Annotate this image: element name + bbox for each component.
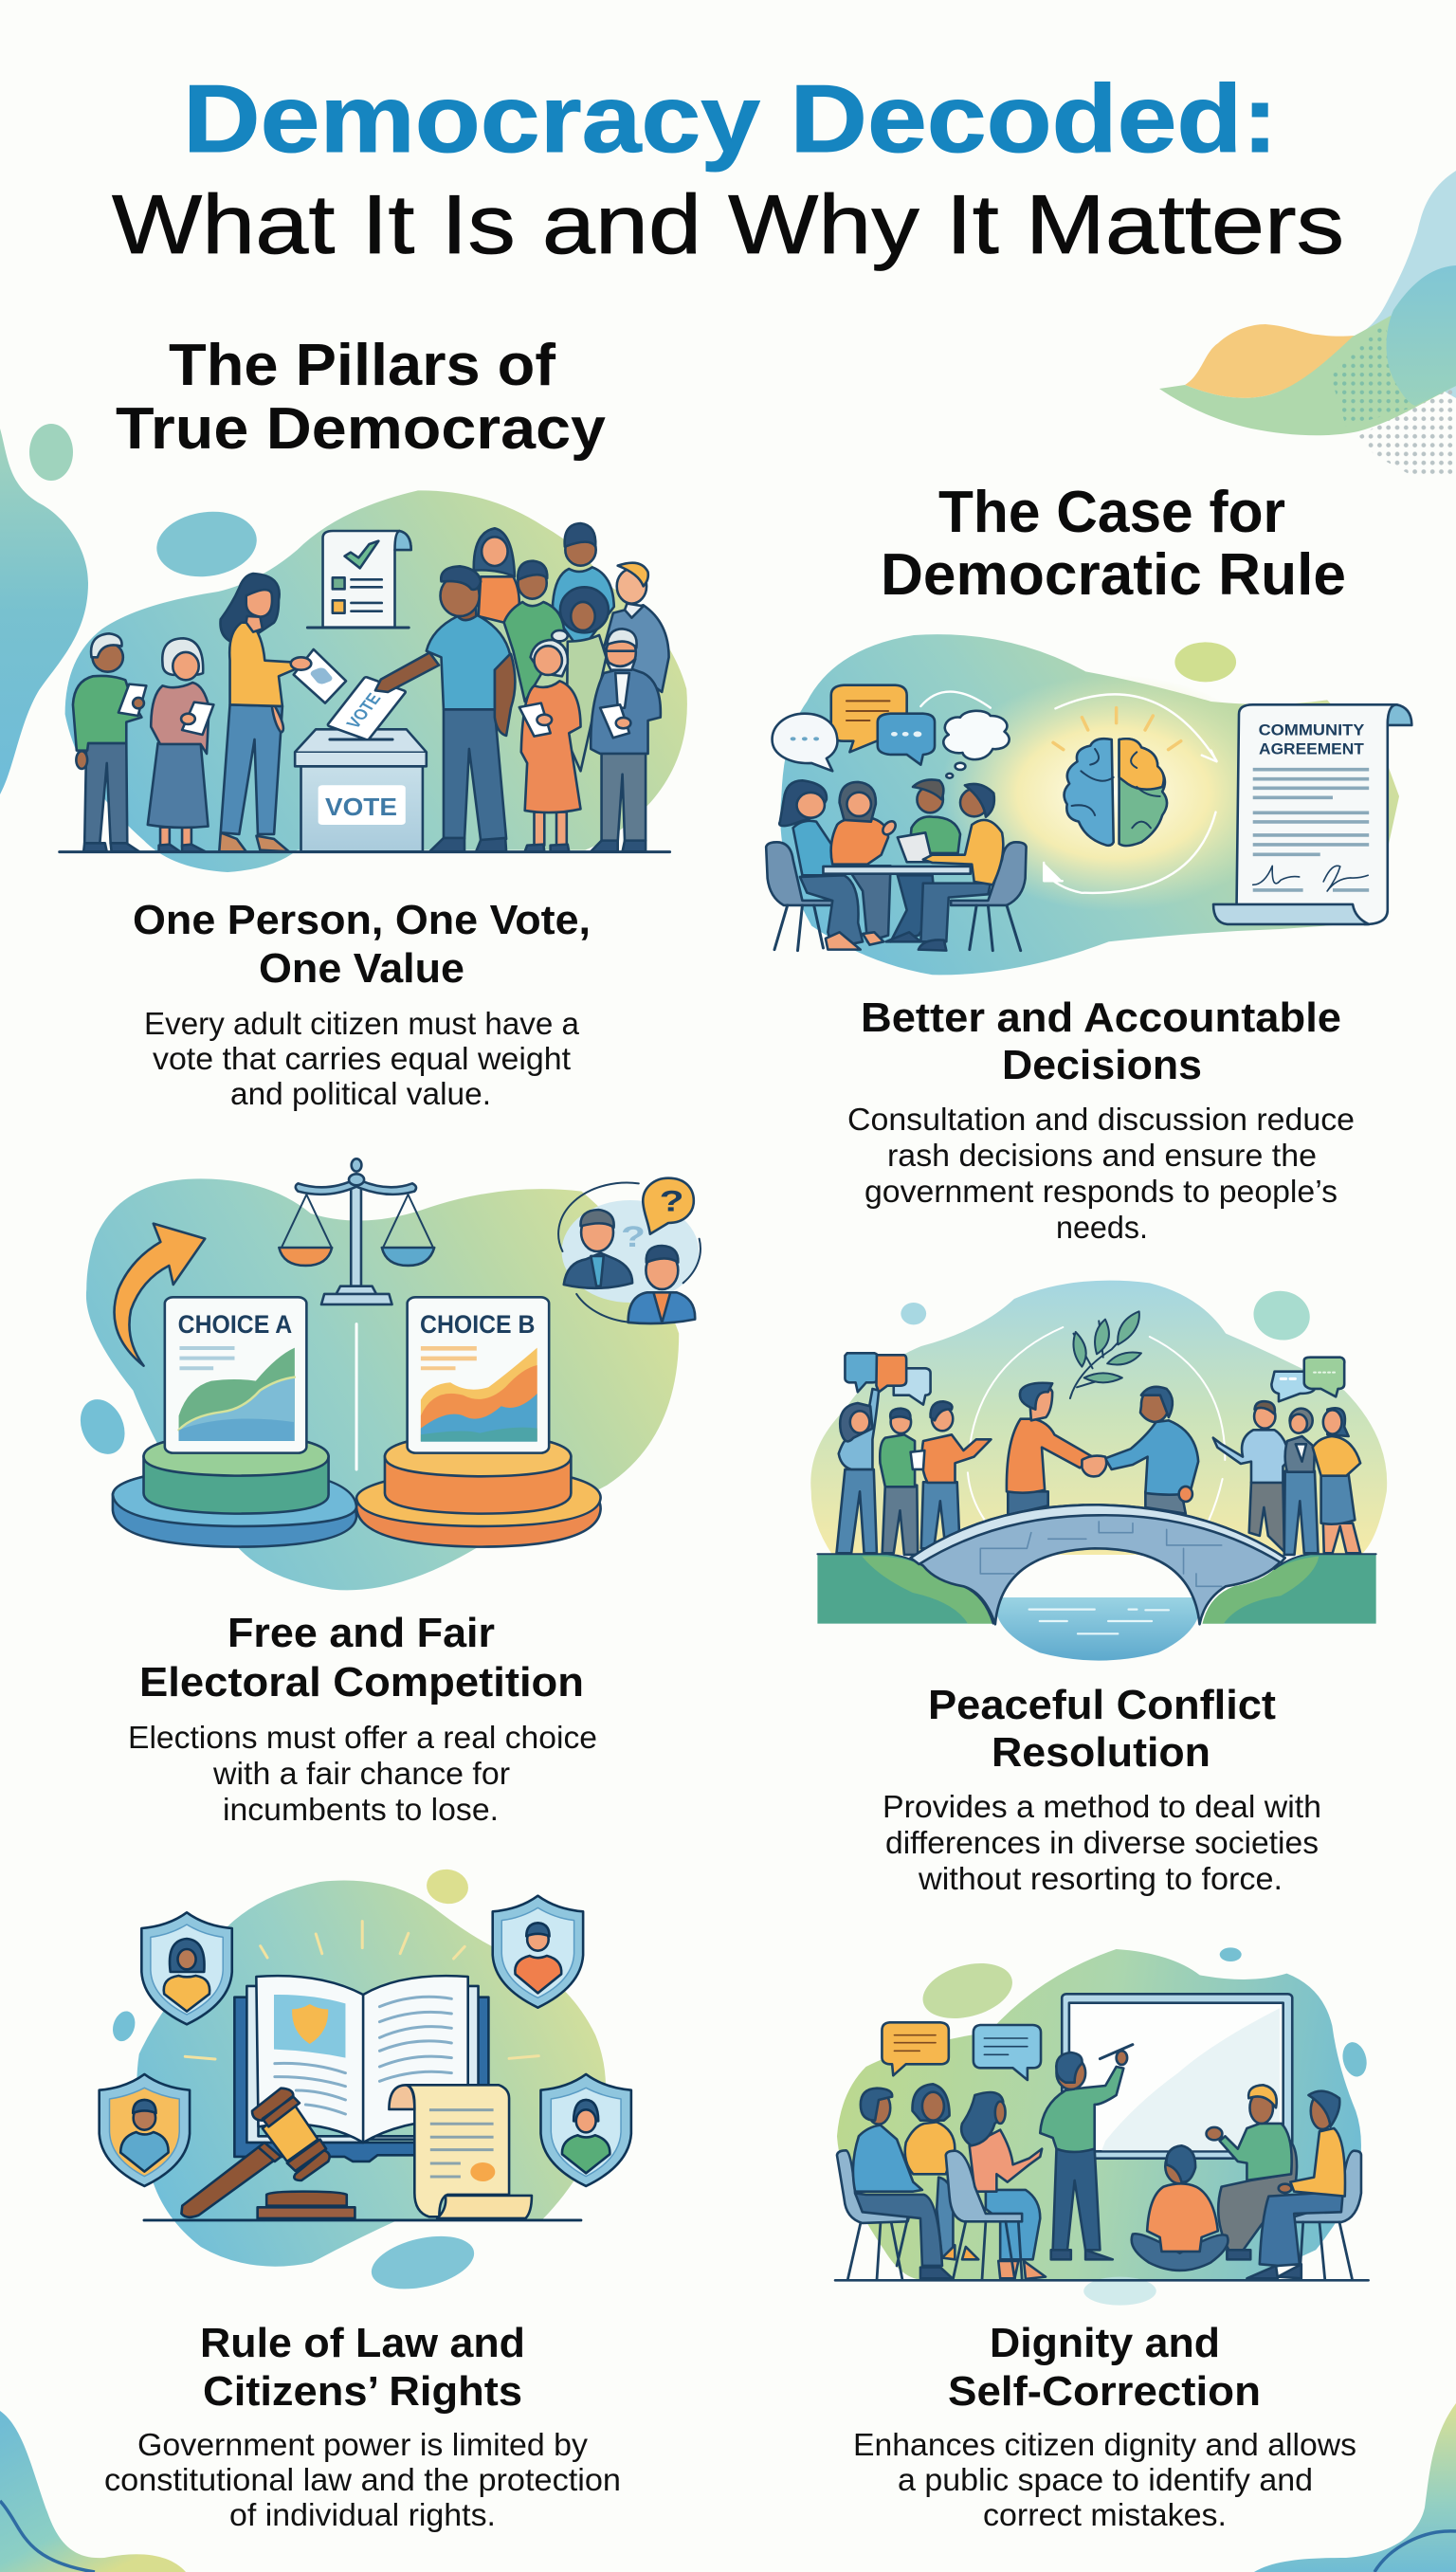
- illustration: rule of law and rights: [100, 1865, 631, 2299]
- shield: woman in yellow: [141, 1912, 232, 2024]
- text: dignity and self correction: Dignity and: [990, 2320, 1220, 2366]
- old man in suit: [591, 629, 661, 851]
- text: peaceful conflict resolution: Provides a method to deal with: [883, 1789, 1321, 1824]
- right group of citizens: [1213, 1358, 1360, 1555]
- handshake pair: [1007, 1383, 1198, 1515]
- heading: pillars of true democracy: The Pillars of: [169, 333, 555, 398]
- text: free and fair electoral competition: [128, 1610, 597, 1827]
- constitution scroll: [389, 2085, 532, 2218]
- seated woman in chair back: [946, 2092, 1046, 2279]
- shield: man in orange: [493, 1896, 583, 2008]
- text: rule of law and citizens rights: [104, 2320, 621, 2532]
- open law book: [234, 1976, 488, 2162]
- choice A podium: [113, 1433, 356, 1547]
- choice B podium: [356, 1433, 601, 1547]
- text: rule of law and citizens rights: constitutional law and the protection: [104, 2462, 621, 2497]
- text: rule of law and citizens rights: Citizens’ Rights: [203, 2368, 522, 2415]
- decoration: bottom left wave: [0, 2411, 186, 2572]
- shield: man in blue: [100, 2074, 190, 2186]
- text: free and fair electoral competition: with a fair chance for: [212, 1756, 510, 1791]
- candidates with question bubble: [558, 1178, 701, 1323]
- discussion table with four people: [766, 779, 1027, 951]
- whiteboard: [1062, 1994, 1292, 2159]
- seated man in green: [1207, 2085, 1297, 2259]
- text: one person one vote: [133, 897, 591, 1111]
- text: peaceful conflict resolution: differences in diverse societies: [885, 1825, 1319, 1860]
- old woman in orange dress: [519, 630, 580, 851]
- water: [995, 1597, 1201, 1661]
- ballot box: VOTE: [325, 793, 397, 821]
- decoration: left wave blob: [0, 424, 88, 794]
- balance scale: [279, 1158, 434, 1304]
- text: peaceful conflict resolution: [883, 1682, 1321, 1896]
- illustration: citizens voting at a ballot box: [60, 490, 687, 872]
- candidates with question bubble: ?: [621, 1219, 646, 1253]
- choice A card: CHOICE A: [178, 1309, 292, 1339]
- flow arrows: [920, 692, 1216, 893]
- community agreement scroll: AGREEMENT: [1259, 740, 1364, 757]
- text: one person one vote: Every adult citizen must have a: [144, 1006, 580, 1041]
- text: better and accountable decisions: Consultation and discussion reduce: [847, 1102, 1355, 1137]
- text: free and fair electoral competition: Elections must offer a real choice: [128, 1720, 597, 1755]
- title: What It Is and Why It Matters: [112, 177, 1344, 271]
- seated man in yellow: [1247, 2091, 1361, 2279]
- text: dignity and self correction: Self-Correction: [948, 2368, 1261, 2415]
- ballot box: [295, 677, 427, 851]
- text: better and accountable decisions: needs.: [1056, 1210, 1148, 1245]
- heading: the case for democratic rule: [881, 480, 1346, 608]
- speech bubbles: [773, 685, 1010, 778]
- decoration: top right waves: [1159, 171, 1456, 476]
- candidates with question bubble: ?: [660, 1184, 684, 1217]
- illustration: dignity and self correction discussion: [835, 1947, 1370, 2306]
- choice A card: [165, 1297, 306, 1453]
- decoration: bottom right wave: [1254, 2403, 1456, 2572]
- presenter at whiteboard: [1040, 2045, 1133, 2259]
- text: free and fair electoral competition: Free and Fair: [228, 1610, 495, 1656]
- voters in background group: [474, 523, 669, 771]
- text: better and accountable decisions: [847, 994, 1355, 1245]
- heading: the case for democratic rule: The Case for: [938, 480, 1285, 545]
- brain: [1053, 708, 1181, 846]
- old woman with ballot: [148, 638, 213, 851]
- community agreement scroll: [1213, 704, 1411, 924]
- text: one person one vote: One Value: [259, 945, 464, 992]
- illustration: peaceful handshake on a bridge: [810, 1281, 1387, 1661]
- orange curved arrow: [115, 1224, 205, 1366]
- stone bridge: [911, 1505, 1285, 1624]
- text: dignity and self correction: Enhances citizen dignity and allows: [853, 2427, 1356, 2462]
- title: Democracy Decoded:: [183, 66, 1278, 173]
- seated group left: [837, 2084, 978, 2279]
- woman in yellow casting ballot: [219, 574, 346, 851]
- heading: the case for democratic rule: Democratic Rule: [881, 542, 1346, 608]
- title: [112, 66, 1344, 271]
- speech bubbles: [882, 2022, 1041, 2080]
- hills: [817, 1554, 993, 1624]
- text: dignity and self correction: [853, 2320, 1356, 2532]
- text: peaceful conflict resolution: without resorting to force.: [918, 1861, 1283, 1896]
- text: rule of law and citizens rights: Government power is limited by: [137, 2427, 589, 2462]
- heading: pillars of true democracy: True Democracy: [116, 396, 607, 462]
- text: rule of law and citizens rights: of individual rights.: [229, 2497, 496, 2532]
- heading: pillars of true democracy: [116, 333, 607, 462]
- old man in green: [73, 633, 146, 851]
- choice B card: [408, 1297, 549, 1453]
- text: rule of law and citizens rights: Rule of Law and: [200, 2320, 525, 2366]
- text: better and accountable decisions: Better and Accountable: [861, 994, 1341, 1041]
- olive branch: [1070, 1311, 1141, 1398]
- shield: man in green: [540, 2074, 631, 2186]
- gavel: [181, 2089, 355, 2218]
- man on floor in orange: [1132, 2145, 1228, 2271]
- text: dignity and self correction: a public space to identify and: [898, 2462, 1313, 2497]
- illustration: free and fair electoral competition: [74, 1158, 701, 1590]
- text: peaceful conflict resolution: Resolution: [992, 1729, 1210, 1776]
- illustration: community deliberation and agreement: [766, 634, 1411, 975]
- man in blue casting ballot: [375, 566, 515, 851]
- voting form: [307, 531, 411, 628]
- text: dignity and self correction: correct mistakes.: [983, 2497, 1227, 2532]
- text: free and fair electoral competition: Electoral Competition: [139, 1659, 584, 1706]
- text: better and accountable decisions: rash decisions and ensure the: [887, 1138, 1317, 1173]
- text: one person one vote: and political value.: [230, 1076, 491, 1111]
- text: one person one vote: vote that carries equal weight: [153, 1041, 571, 1076]
- text: better and accountable decisions: Decisions: [1002, 1042, 1202, 1088]
- community agreement scroll: COMMUNITY: [1259, 721, 1364, 739]
- left group of citizens: [836, 1353, 991, 1555]
- text: one person one vote: One Person, One Vote,: [133, 897, 591, 943]
- choice B card: CHOICE B: [420, 1309, 535, 1339]
- text: free and fair electoral competition: incumbents to lose.: [223, 1792, 499, 1827]
- text: peaceful conflict resolution: Peaceful Conflict: [928, 1682, 1276, 1728]
- ballot box: VOTE: [341, 691, 387, 730]
- text: better and accountable decisions: government responds to people’s: [864, 1174, 1338, 1209]
